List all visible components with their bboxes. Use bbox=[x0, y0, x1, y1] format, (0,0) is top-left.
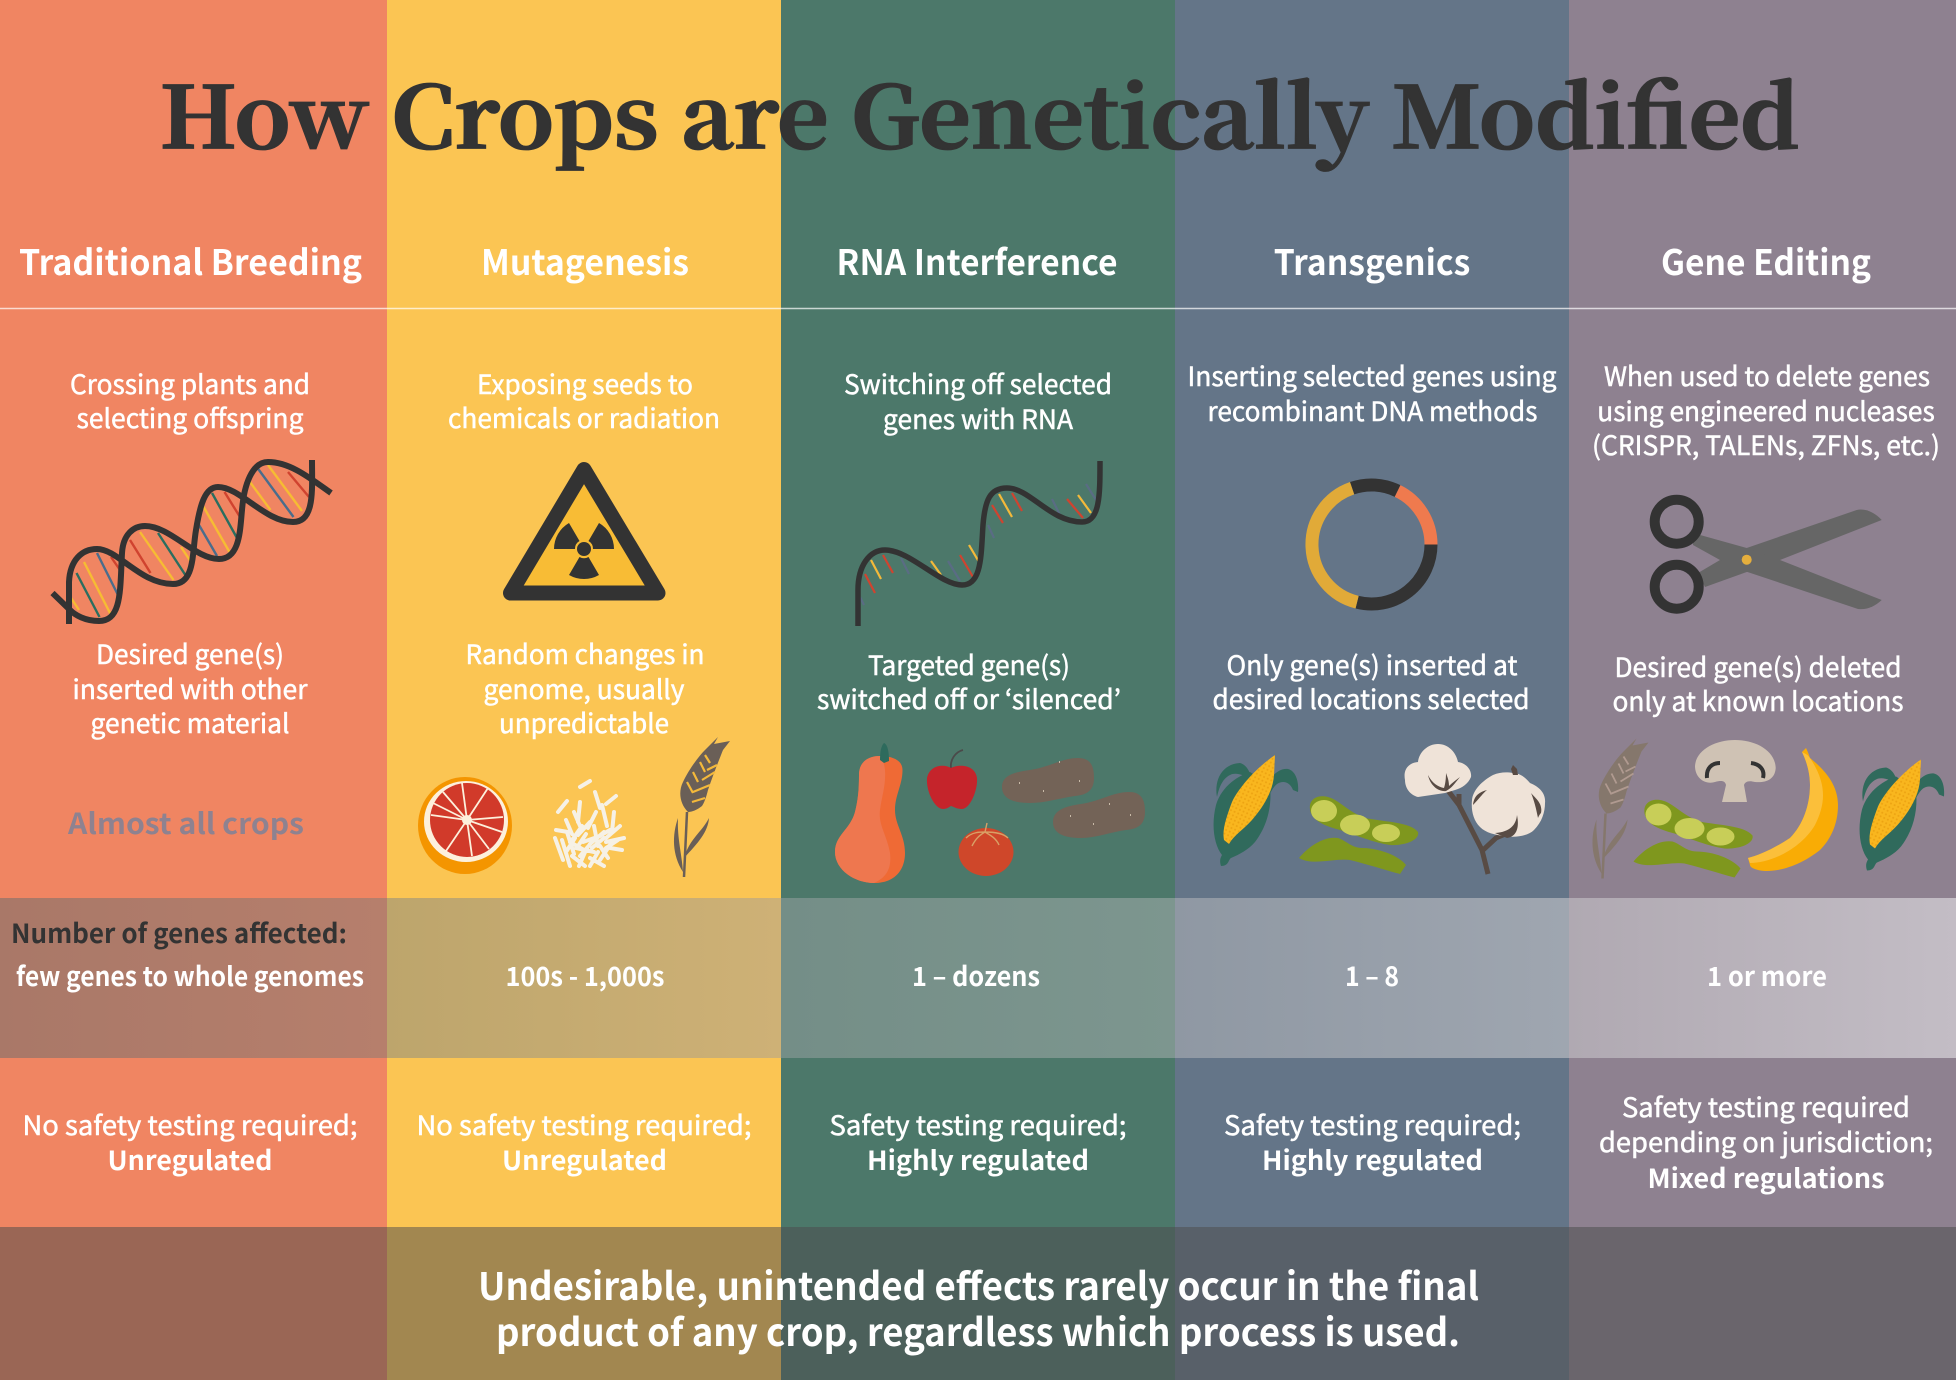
icon: radiation warning triangle bbox=[510, 470, 658, 593]
description: gene editing: using engineered nucleases bbox=[1597, 390, 1935, 429]
heading: mutagenesis: Mutagenesis bbox=[481, 235, 689, 286]
heading: RNA interference: RNA Interference bbox=[836, 235, 1118, 286]
description: mutagenesis: chemicals or radiation bbox=[448, 397, 720, 436]
outcome: mutagenesis bbox=[466, 633, 704, 741]
icon: banana bbox=[1748, 748, 1838, 871]
outcome: gene editing: only at known locations bbox=[1612, 680, 1904, 719]
panel: mutagenesis column bbox=[387, 0, 781, 1380]
icon: plasmid ring bbox=[1312, 485, 1431, 604]
conclusion text: product of any crop, regardless which process is used. bbox=[496, 1302, 1460, 1357]
description: traditional breeding bbox=[70, 363, 310, 436]
panel: traditional breeding column bbox=[0, 0, 387, 1380]
outcome: transgenics bbox=[1212, 644, 1530, 717]
regulation: transgenics bbox=[1224, 1104, 1521, 1178]
icon: soybean pods bbox=[1634, 800, 1753, 878]
panel: gene editing column bbox=[1569, 0, 1956, 1380]
icon: scissors bbox=[1655, 500, 1882, 609]
title: How Crops are Genetically Modified bbox=[160, 51, 1800, 173]
band value: traditional breeding: few genes to whole genomes bbox=[16, 955, 364, 994]
panel: bottom conclusion band bbox=[0, 1227, 1956, 1380]
regulation: mutagenesis bbox=[416, 1104, 752, 1178]
panel: transgenics column bbox=[1175, 0, 1569, 1380]
icon: tomato bbox=[958, 823, 1014, 876]
icon: grapefruit bbox=[418, 777, 512, 874]
heading: transgenics: Transgenics bbox=[1274, 235, 1470, 286]
band value: RNA interference: 1 – dozens bbox=[912, 955, 1040, 994]
outcome: RNA interference: Targeted gene(s) bbox=[868, 644, 1070, 683]
regulation: gene editing: depending on jurisdiction; bbox=[1599, 1121, 1933, 1160]
description: RNA interference: genes with RNA bbox=[883, 398, 1073, 437]
description: gene editing: When used to delete genes bbox=[1604, 355, 1930, 394]
panel: number of genes affected band bbox=[0, 898, 1956, 1058]
description: transgenics: Inserting selected genes using bbox=[1188, 355, 1557, 394]
icon: corn bbox=[1214, 755, 1298, 866]
conclusion text: Undesirable, unintended effects rarely occur in the final bbox=[478, 1256, 1479, 1311]
regulation: transgenics: Safety testing required; bbox=[1224, 1104, 1521, 1143]
description: RNA interference bbox=[844, 363, 1112, 437]
icon: wheat stalk bbox=[674, 737, 730, 877]
icon: mushroom bbox=[1695, 740, 1776, 802]
outcome: traditional breeding: inserted with other bbox=[72, 668, 308, 707]
outcome: mutagenesis: Random changes in bbox=[466, 633, 704, 672]
description: transgenics bbox=[1188, 355, 1557, 429]
outcome: gene editing: Desired gene(s) deleted bbox=[1614, 646, 1902, 685]
outcome: traditional breeding bbox=[72, 633, 308, 741]
outcome: traditional breeding: Desired gene(s) bbox=[96, 633, 284, 672]
description: gene editing: (CRISPR, TALENs, ZFNs, etc.) bbox=[1592, 424, 1940, 463]
icon: corn bbox=[1860, 760, 1944, 870]
regulation: RNA interference: Highly regulated bbox=[867, 1139, 1089, 1178]
band value: gene editing: 1 or more bbox=[1707, 955, 1827, 994]
band label: number of genes affected: Number of genes affected: bbox=[11, 912, 347, 951]
description: mutagenesis: Exposing seeds to bbox=[477, 363, 693, 402]
regulation: RNA interference bbox=[830, 1104, 1126, 1178]
description: mutagenesis bbox=[448, 363, 720, 436]
icon: rice grains bbox=[555, 781, 624, 866]
icon: cotton bolls bbox=[1405, 744, 1545, 874]
description: gene editing bbox=[1592, 355, 1940, 463]
regulation: gene editing: Mixed regulations bbox=[1648, 1157, 1884, 1196]
panel: RNA interference column bbox=[781, 0, 1175, 1380]
heading: gene editing: Gene Editing bbox=[1661, 235, 1871, 286]
regulation: gene editing bbox=[1599, 1086, 1933, 1196]
regulation: traditional breeding bbox=[22, 1104, 358, 1178]
outcome: mutagenesis: unpredictable bbox=[499, 702, 669, 741]
outcome: transgenics: desired locations selected bbox=[1212, 678, 1530, 717]
band value: mutagenesis: 100s - 1,000s bbox=[506, 955, 664, 994]
description: traditional breeding: Crossing plants and bbox=[70, 363, 310, 402]
icon: RNA strand bbox=[858, 461, 1100, 626]
crops label: almost all crops: Almost all crops bbox=[67, 801, 304, 843]
icon: DNA double helix bbox=[52, 460, 331, 624]
icon: wheat stalk bbox=[1592, 738, 1648, 878]
outcome: gene editing bbox=[1612, 646, 1904, 719]
regulation: traditional breeding: Unregulated bbox=[108, 1139, 272, 1178]
band value: transgenics: 1 – 8 bbox=[1345, 955, 1399, 994]
outcome: transgenics: Only gene(s) inserted at bbox=[1226, 644, 1518, 683]
outcome: mutagenesis: genome, usually bbox=[484, 668, 685, 707]
description: traditional breeding: selecting offspring bbox=[76, 397, 304, 436]
regulation: gene editing: Safety testing required bbox=[1622, 1086, 1910, 1125]
icon: potatoes bbox=[1002, 758, 1145, 838]
description: transgenics: recombinant DNA methods bbox=[1208, 390, 1538, 429]
conclusion text bbox=[478, 1256, 1479, 1357]
regulation: RNA interference: Safety testing required; bbox=[830, 1104, 1126, 1143]
regulation: traditional breeding: No safety testing required; bbox=[22, 1104, 358, 1143]
outcome: RNA interference bbox=[817, 644, 1121, 717]
icon: soybean pods bbox=[1299, 796, 1418, 874]
regulation: mutagenesis: Unregulated bbox=[502, 1139, 667, 1178]
outcome: traditional breeding: genetic material bbox=[90, 702, 290, 741]
regulation: mutagenesis: No safety testing required; bbox=[416, 1104, 752, 1143]
icon: apple bbox=[927, 750, 977, 809]
regulation: transgenics: Highly regulated bbox=[1262, 1139, 1483, 1178]
heading: traditional breeding: Traditional Breeding bbox=[19, 235, 362, 286]
description: RNA interference: Switching off selected bbox=[844, 363, 1112, 402]
icon: butternut squash bbox=[835, 743, 905, 883]
outcome: RNA interference: switched off or ‘silenced’ bbox=[817, 678, 1121, 717]
